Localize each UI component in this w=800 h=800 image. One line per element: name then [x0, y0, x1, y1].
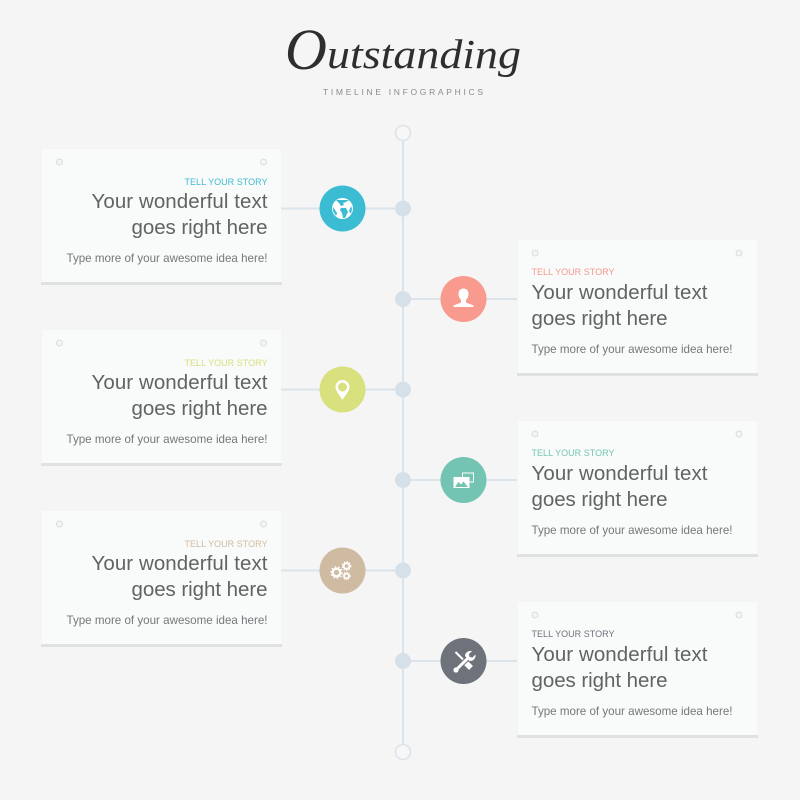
- panel: step 5: TELL YOUR STORY: [184, 539, 268, 549]
- panel: step 5: [41, 511, 282, 647]
- icon: gears: [320, 548, 366, 594]
- panel: step 3: Your wonderful text: [92, 371, 268, 394]
- title: utstanding: [327, 31, 521, 77]
- panel: step 4: Your wonderful text: [532, 462, 708, 485]
- icon: person: [440, 276, 486, 322]
- panel: step 1: [41, 149, 282, 285]
- panel: step 5: Your wonderful text: [92, 552, 268, 575]
- subtitle: TIMELINE INFOGRAPHICS: [323, 87, 483, 97]
- icon: pictures: [440, 457, 486, 503]
- panel: step 3: [41, 330, 282, 466]
- panel: step 1: Your wonderful text: [92, 190, 268, 213]
- connector: step 5: [281, 562, 411, 578]
- icon: tools: [440, 638, 486, 684]
- panel: step 6: Type more of your awesome idea here!: [532, 705, 732, 718]
- panel: step 1: Type more of your awesome idea here!: [66, 252, 268, 265]
- icon: globe: [320, 186, 366, 232]
- connector: step 4: [395, 472, 517, 488]
- panel: step 4: TELL YOUR STORY: [532, 448, 614, 458]
- panel: step 4: Type more of your awesome idea here!: [532, 524, 732, 537]
- timeline spine: [396, 126, 410, 760]
- connector: step 6: [395, 653, 517, 669]
- title: [285, 17, 521, 82]
- connector: step 1: [281, 200, 411, 216]
- panel: step 6: TELL YOUR STORY: [532, 629, 614, 639]
- panel: step 1: TELL YOUR STORY: [184, 177, 268, 187]
- icon: location pin: [320, 366, 366, 412]
- panel: step 3: goes right here: [132, 397, 268, 420]
- connector: step 2: [395, 291, 517, 307]
- connector: step 3: [281, 382, 411, 398]
- panel: step 4: goes right here: [532, 488, 668, 511]
- panel: step 6: Your wonderful text: [532, 643, 708, 666]
- panel: step 3: Type more of your awesome idea here!: [66, 433, 268, 446]
- panel: step 2: Your wonderful text: [532, 281, 708, 304]
- panel: step 5: Type more of your awesome idea here!: [66, 614, 268, 627]
- panel: step 4: [517, 421, 758, 557]
- panel: step 5: goes right here: [132, 578, 268, 601]
- title: O: [285, 17, 327, 82]
- panel: step 6: [517, 602, 758, 738]
- panel: step 2: TELL YOUR STORY: [532, 267, 614, 277]
- panel: step 2: goes right here: [532, 307, 668, 330]
- panel: step 2: Type more of your awesome idea here!: [532, 343, 732, 356]
- panel: step 2: [517, 240, 758, 376]
- panel: step 3: TELL YOUR STORY: [184, 358, 268, 368]
- panel: step 1: goes right here: [132, 216, 268, 239]
- panel: step 6: goes right here: [532, 669, 668, 692]
